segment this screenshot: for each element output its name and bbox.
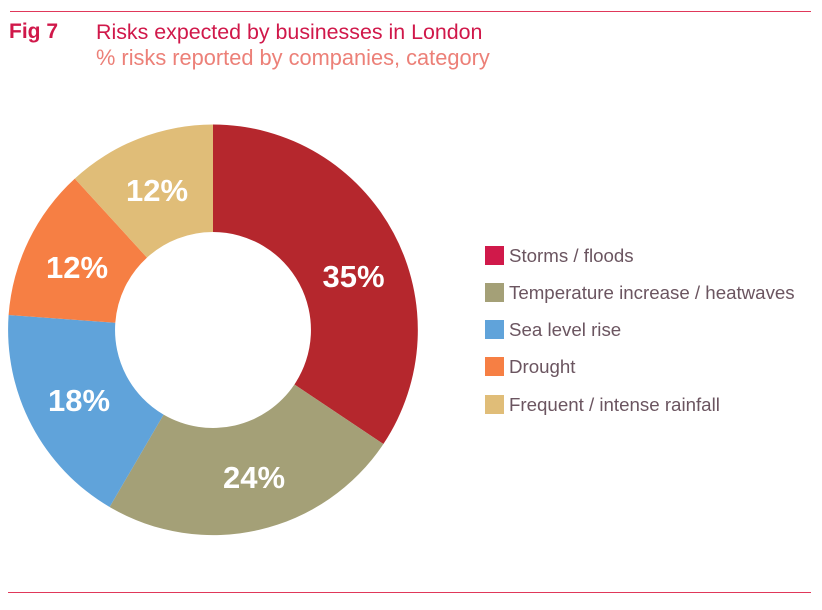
legend xyxy=(485,245,795,415)
legend label: sea level: Sea level rise xyxy=(509,319,621,340)
title: Risks expected by businesses in London xyxy=(96,20,482,44)
value labels: 24% xyxy=(223,460,285,495)
figure number: Fig 7 xyxy=(9,20,58,43)
legend swatch: sea level xyxy=(485,320,504,339)
legend label: drought: Drought xyxy=(509,356,575,377)
segment: storms / floods 35% xyxy=(213,124,418,444)
value labels: 18% xyxy=(48,383,110,418)
subtitle: % risks reported by companies, category xyxy=(96,45,490,70)
segment: drought 12% xyxy=(9,179,147,323)
legend label: temperature: Temperature increase / heatwaves xyxy=(509,282,795,303)
segment: temperature increase 24% xyxy=(110,384,383,535)
legend swatch: drought xyxy=(485,357,504,376)
value labels xyxy=(46,173,385,495)
segment: rainfall 12% xyxy=(75,124,213,258)
legend label: storms / floods: Storms / floods xyxy=(509,245,634,266)
legend swatch: temperature xyxy=(485,283,504,302)
legend swatch: rainfall xyxy=(485,395,504,414)
value labels: 35% xyxy=(322,259,385,294)
legend label: rainfall: Frequent / intense rainfall xyxy=(509,394,720,415)
legend swatch: storms / floods xyxy=(485,246,504,265)
value labels: 12% xyxy=(46,250,108,285)
value labels: 12% xyxy=(126,173,188,208)
segment: sea level rise 18% xyxy=(8,315,164,507)
